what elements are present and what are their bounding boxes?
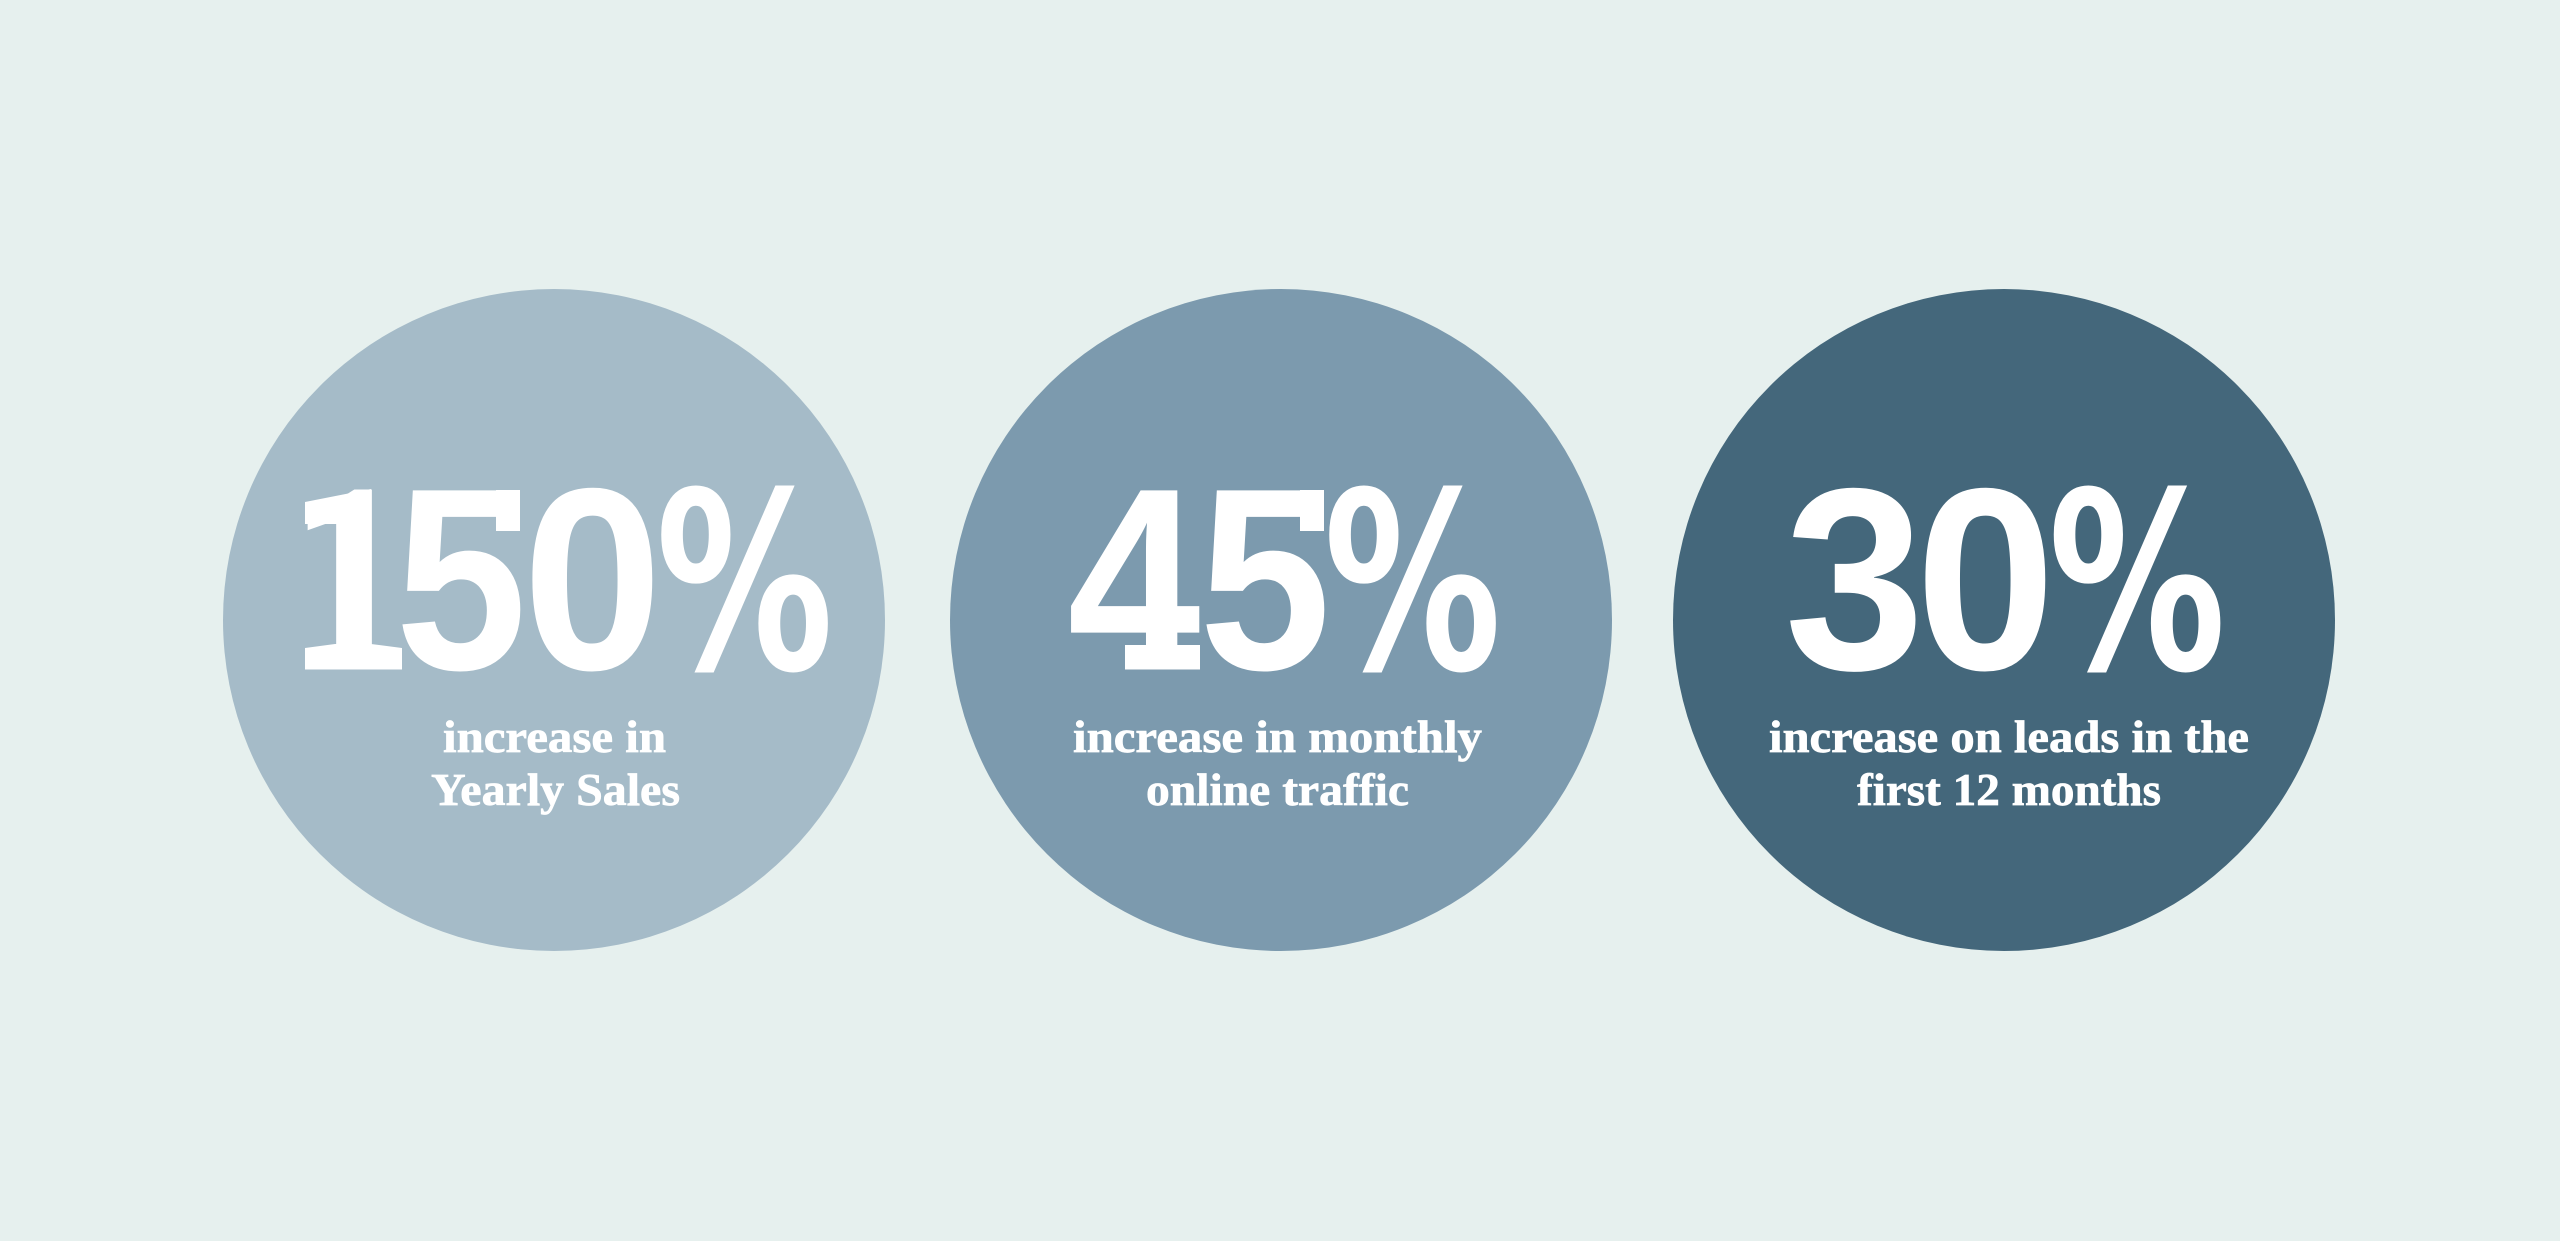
panel: 150% yearly sales	[223, 289, 885, 951]
label: increase in monthly online traffic: online traffic	[1146, 764, 1409, 815]
label: increase on leads in the first 12 months: increase on leads in the	[1769, 711, 2249, 762]
label: increase on leads in the first 12 months	[1769, 711, 2249, 815]
stat: 45%: 5	[1199, 434, 1331, 724]
stat: 30%: %	[2048, 439, 2226, 728]
stat: 30%: 0	[1915, 435, 2056, 725]
stat: 45%	[1067, 434, 1501, 728]
label: increase in monthly online traffic	[1073, 711, 1482, 815]
label: increase in Yearly Sales	[431, 711, 680, 815]
stat: 150%: 5	[395, 434, 527, 724]
label: increase on leads in the first 12 months: first 12 months	[1857, 764, 2161, 815]
stat: 45%: 4	[1067, 434, 1201, 724]
panel: 45% monthly online traffic	[950, 289, 1612, 951]
stat: 150%: 0	[522, 435, 663, 725]
stat: 150%: %	[656, 439, 833, 728]
stat: 30%	[1784, 435, 2226, 728]
label: increase in Yearly Sales: Yearly Sales	[431, 764, 680, 815]
stat: 45%: %	[1324, 439, 1501, 728]
stat: 150%	[287, 427, 833, 728]
label: increase in Yearly Sales: increase in	[443, 711, 666, 762]
stat: 150%: 1	[287, 427, 414, 728]
circle: mid blue	[950, 289, 1612, 951]
circle: dark blue	[1673, 289, 2335, 951]
label: increase in monthly online traffic: increase in monthly	[1073, 711, 1482, 762]
stat: 30%: 3	[1784, 435, 1925, 725]
circle: light blue	[223, 289, 885, 951]
panel: 30% leads in first 12 months	[1673, 289, 2335, 951]
